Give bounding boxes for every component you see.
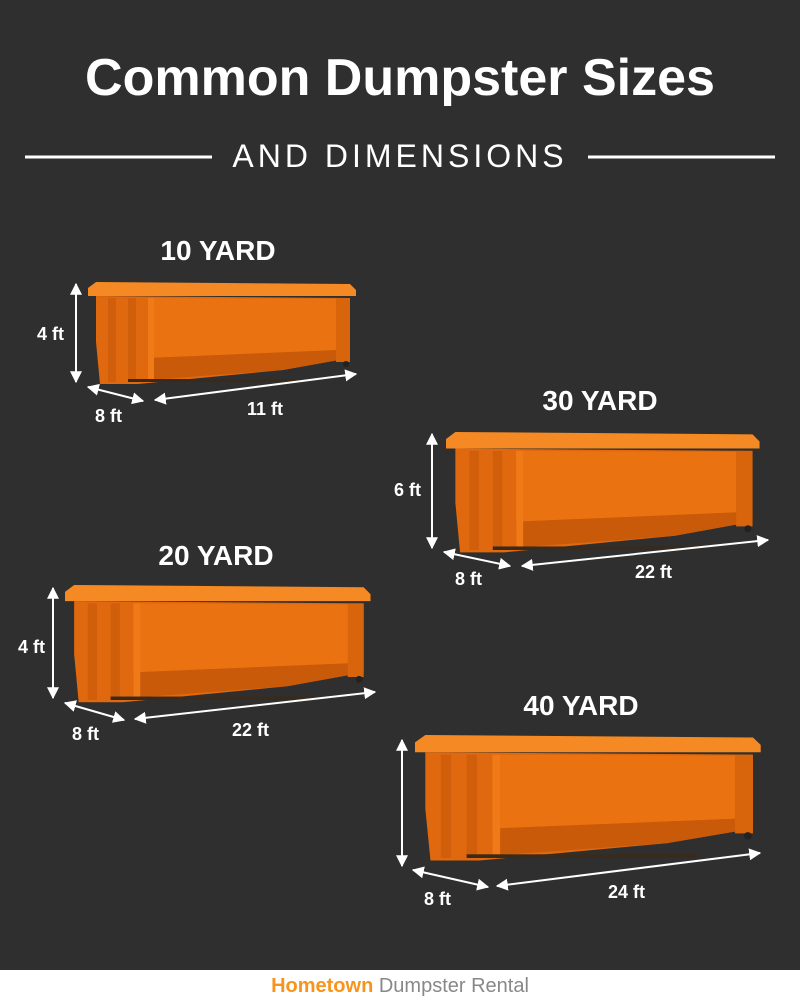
panel: 10 yard: 10 YARD [160,235,276,266]
panel: 20 yard: 4 ft [18,637,45,657]
panel: 30 yard: 8 ft [455,569,482,589]
panel: 10 yard: 4 ft [37,324,64,344]
panel: 40 yard: 40 YARD [523,690,639,721]
panel: 40 yard: 8 ft [424,889,451,909]
panel: 10 yard: 8 ft [95,406,122,426]
panel: 30 yard [394,385,768,589]
panel: 40 yard: 24 ft [608,882,645,902]
panel: 20 yard: 20 YARD [158,540,274,571]
panel: 30 yard: 6 ft [394,480,421,500]
panel: 30 yard: 30 YARD [542,385,658,416]
subtitle: AND DIMENSIONS [232,138,568,174]
footer [0,970,800,1000]
title: Common Dumpster Sizes [85,49,715,107]
panel: 20 yard: 22 ft [232,720,269,740]
footer: Hometown Dumpster Rental [271,975,529,997]
panel: 10 yard [37,235,356,426]
panel: 10 yard: 11 ft [247,399,283,419]
panel: 40 yard [402,690,761,909]
panel: 30 yard: 22 ft [635,562,672,582]
panel: 20 yard [18,540,375,744]
panel: 20 yard: 8 ft [72,724,99,744]
